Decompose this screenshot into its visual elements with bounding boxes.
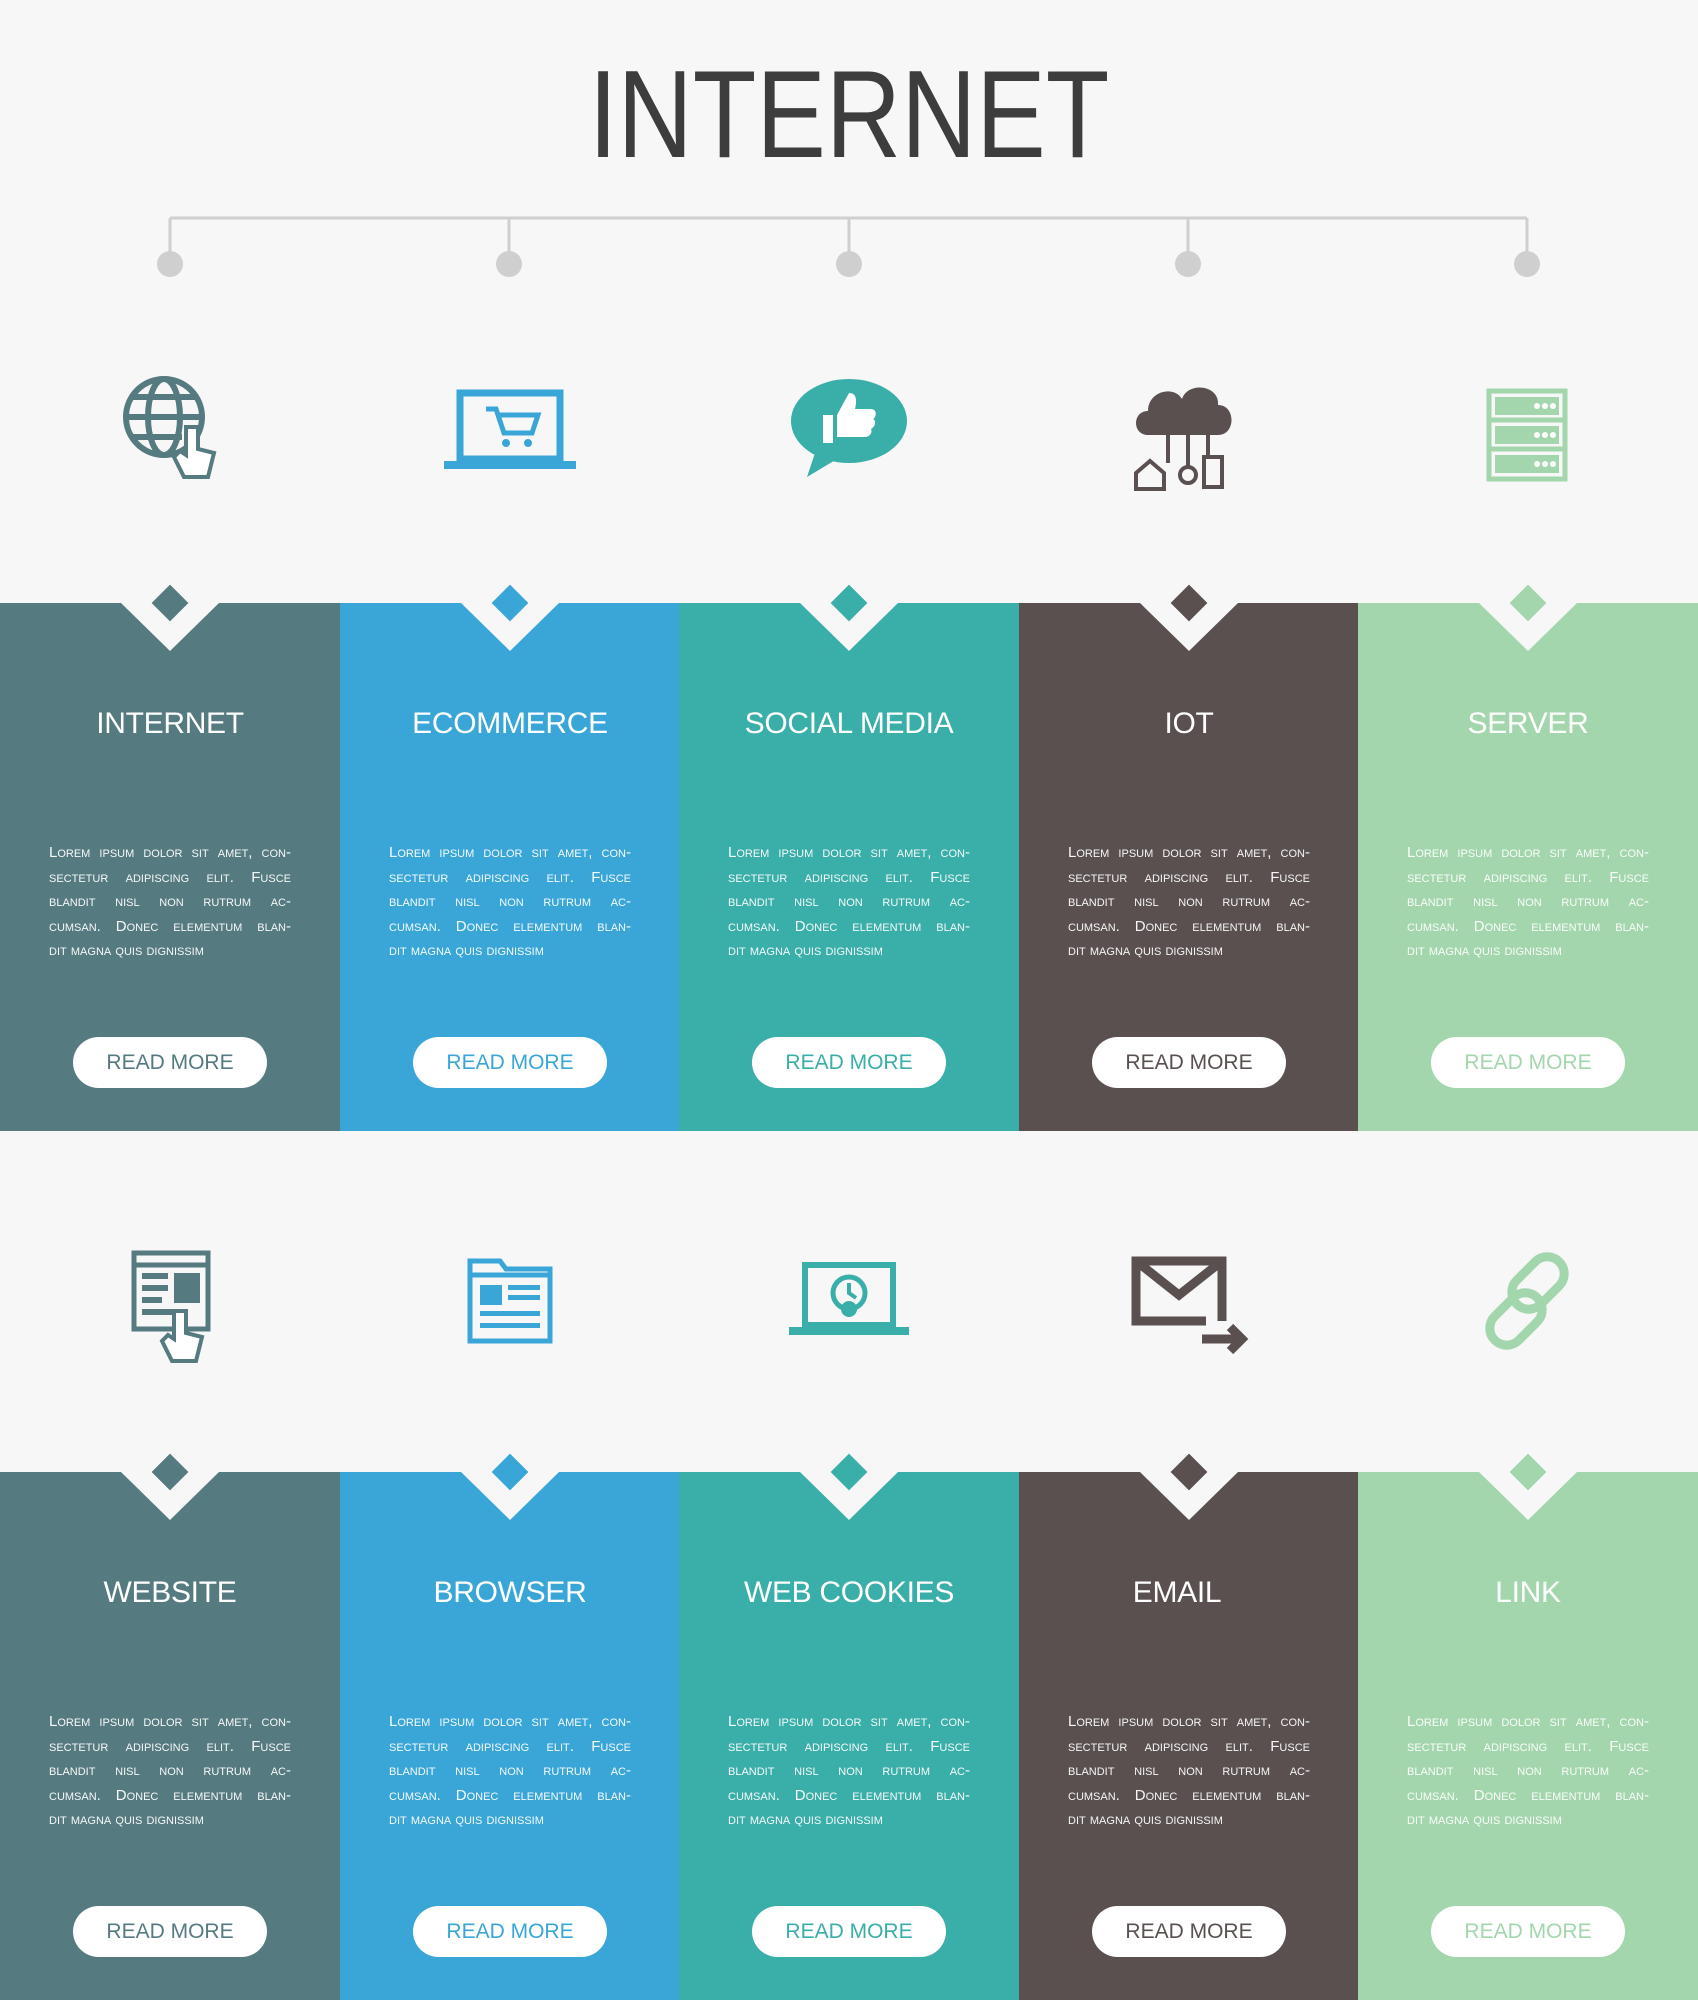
panel: link: blandit nisl non rutrum ac- bbox=[1407, 1762, 1649, 1779]
icon: cloud iot bbox=[1134, 388, 1232, 491]
icon: browser bbox=[468, 1258, 552, 1344]
panel: internet: READ MORE bbox=[106, 1051, 234, 1074]
icon: server bbox=[1486, 388, 1568, 482]
panel: email: EMAIL bbox=[1133, 1576, 1221, 1609]
icon: website with hand bbox=[132, 1250, 210, 1363]
panel: internet: cumsan. Donec elementum blan- bbox=[49, 918, 291, 934]
panel: website: blandit nisl non rutrum ac- bbox=[49, 1762, 291, 1779]
panel: server: READ MORE bbox=[1464, 1051, 1592, 1074]
panel: link bbox=[1358, 1472, 1698, 2000]
panel: email: blandit nisl non rutrum ac- bbox=[1068, 1762, 1310, 1779]
panel: browser: sectetur adipiscing elit. Fusce bbox=[389, 1738, 631, 1754]
icon: laptop cookies gear bbox=[789, 1262, 909, 1335]
panel: social media: cumsan. Donec elementum blan- bbox=[728, 918, 970, 934]
panel: ecommerce: Lorem ipsum dolor sit amet, con- bbox=[389, 844, 631, 861]
panel: web cookies: WEB COOKIES bbox=[744, 1576, 954, 1609]
panel: iot: IOT bbox=[1164, 707, 1214, 740]
panel: link: dit magna quis dignissim bbox=[1407, 1811, 1562, 1828]
panel: website: sectetur adipiscing elit. Fusce bbox=[49, 1738, 291, 1754]
panel: server bbox=[1358, 603, 1698, 1131]
panel: link: Lorem ipsum dolor sit amet, con- bbox=[1407, 1713, 1649, 1730]
panel: website bbox=[0, 1472, 340, 2000]
panel: browser: Lorem ipsum dolor sit amet, con- bbox=[389, 1713, 631, 1730]
panel: email: Lorem ipsum dolor sit amet, con- bbox=[1068, 1713, 1310, 1730]
panel: internet: INTERNET bbox=[96, 707, 244, 740]
panel: iot: sectetur adipiscing elit. Fusce bbox=[1068, 868, 1310, 886]
panel: internet: dit magna quis dignissim bbox=[49, 942, 204, 959]
panel: link: cumsan. Donec elementum blan- bbox=[1407, 1786, 1649, 1804]
panel: website: WEBSITE bbox=[104, 1576, 236, 1609]
panel: ecommerce bbox=[340, 603, 680, 1131]
panel: web cookies: READ MORE bbox=[785, 1920, 913, 1943]
panel: social media: SOCIAL MEDIA bbox=[745, 707, 953, 740]
panel: browser bbox=[340, 1472, 680, 2000]
panel: iot: Lorem ipsum dolor sit amet, con- bbox=[1068, 844, 1310, 861]
panel: email: dit magna quis dignissim bbox=[1068, 1811, 1223, 1828]
panel: ecommerce: cumsan. Donec elementum blan- bbox=[389, 918, 631, 934]
panel: social media: dit magna quis dignissim bbox=[728, 942, 883, 959]
icon: link bbox=[1485, 1252, 1569, 1350]
panel: web cookies: dit magna quis dignissim bbox=[728, 1811, 883, 1828]
panel: iot: READ MORE bbox=[1125, 1051, 1253, 1074]
panel: email: cumsan. Donec elementum blan- bbox=[1068, 1786, 1310, 1804]
title: INTERNET bbox=[589, 46, 1109, 184]
icon: laptop cart bbox=[444, 390, 576, 469]
panel: web cookies bbox=[679, 1472, 1019, 2000]
panel: social media: READ MORE bbox=[785, 1051, 913, 1074]
panel: web cookies: Lorem ipsum dolor sit amet, con- bbox=[728, 1713, 970, 1730]
panel: link: LINK bbox=[1495, 1576, 1561, 1609]
panel: social media bbox=[679, 603, 1019, 1131]
panel: internet: sectetur adipiscing elit. Fusce bbox=[49, 868, 291, 886]
panel: website: Lorem ipsum dolor sit amet, con- bbox=[49, 1713, 291, 1730]
panel: ecommerce: READ MORE bbox=[446, 1051, 574, 1074]
panel: web cookies: cumsan. Donec elementum blan- bbox=[728, 1786, 970, 1804]
icon: speech bubble thumbs up bbox=[791, 379, 907, 477]
panel: social media: Lorem ipsum dolor sit amet, con- bbox=[728, 844, 970, 861]
panel: server: Lorem ipsum dolor sit amet, con- bbox=[1407, 844, 1649, 861]
panel: internet: blandit nisl non rutrum ac- bbox=[49, 893, 291, 910]
panel: browser: dit magna quis dignissim bbox=[389, 1811, 544, 1828]
panel: browser: blandit nisl non rutrum ac- bbox=[389, 1762, 631, 1779]
panel: browser: cumsan. Donec elementum blan- bbox=[389, 1786, 631, 1804]
panel: ecommerce: blandit nisl non rutrum ac- bbox=[389, 893, 631, 910]
panel: internet bbox=[0, 603, 340, 1131]
panel: website: READ MORE bbox=[106, 1920, 234, 1943]
panel: ecommerce: sectetur adipiscing elit. Fusce bbox=[389, 868, 631, 886]
panel: server: sectetur adipiscing elit. Fusce bbox=[1407, 868, 1649, 886]
panel: ecommerce: ECOMMERCE bbox=[412, 707, 608, 740]
panel: iot: dit magna quis dignissim bbox=[1068, 942, 1223, 959]
connector tree bbox=[157, 216, 1540, 277]
panel: link: READ MORE bbox=[1464, 1920, 1592, 1943]
panel: internet: Lorem ipsum dolor sit amet, con- bbox=[49, 844, 291, 861]
panel: website: dit magna quis dignissim bbox=[49, 1811, 204, 1828]
panel: server: cumsan. Donec elementum blan- bbox=[1407, 918, 1649, 934]
panel: social media: blandit nisl non rutrum ac- bbox=[728, 893, 970, 910]
panel: browser: BROWSER bbox=[434, 1576, 586, 1609]
panel: web cookies: blandit nisl non rutrum ac- bbox=[728, 1762, 970, 1779]
panel: link: sectetur adipiscing elit. Fusce bbox=[1407, 1738, 1649, 1754]
icon: globe with hand bbox=[123, 376, 216, 479]
panel: web cookies: sectetur adipiscing elit. Fusce bbox=[728, 1738, 970, 1754]
panel: email: sectetur adipiscing elit. Fusce bbox=[1068, 1738, 1310, 1754]
panel: iot: cumsan. Donec elementum blan- bbox=[1068, 918, 1310, 934]
icon: email bbox=[1132, 1256, 1248, 1354]
panel: iot: blandit nisl non rutrum ac- bbox=[1068, 893, 1310, 910]
panel: email: READ MORE bbox=[1125, 1920, 1253, 1943]
panel: browser: READ MORE bbox=[446, 1920, 574, 1943]
panel: server: SERVER bbox=[1467, 707, 1589, 740]
panel: server: dit magna quis dignissim bbox=[1407, 942, 1562, 959]
panel: iot bbox=[1019, 603, 1359, 1131]
panel: ecommerce: dit magna quis dignissim bbox=[389, 942, 544, 959]
panel: server: blandit nisl non rutrum ac- bbox=[1407, 893, 1649, 910]
panel: website: cumsan. Donec elementum blan- bbox=[49, 1786, 291, 1804]
panel: social media: sectetur adipiscing elit. Fusce bbox=[728, 868, 970, 886]
panel: email bbox=[1019, 1472, 1359, 2000]
